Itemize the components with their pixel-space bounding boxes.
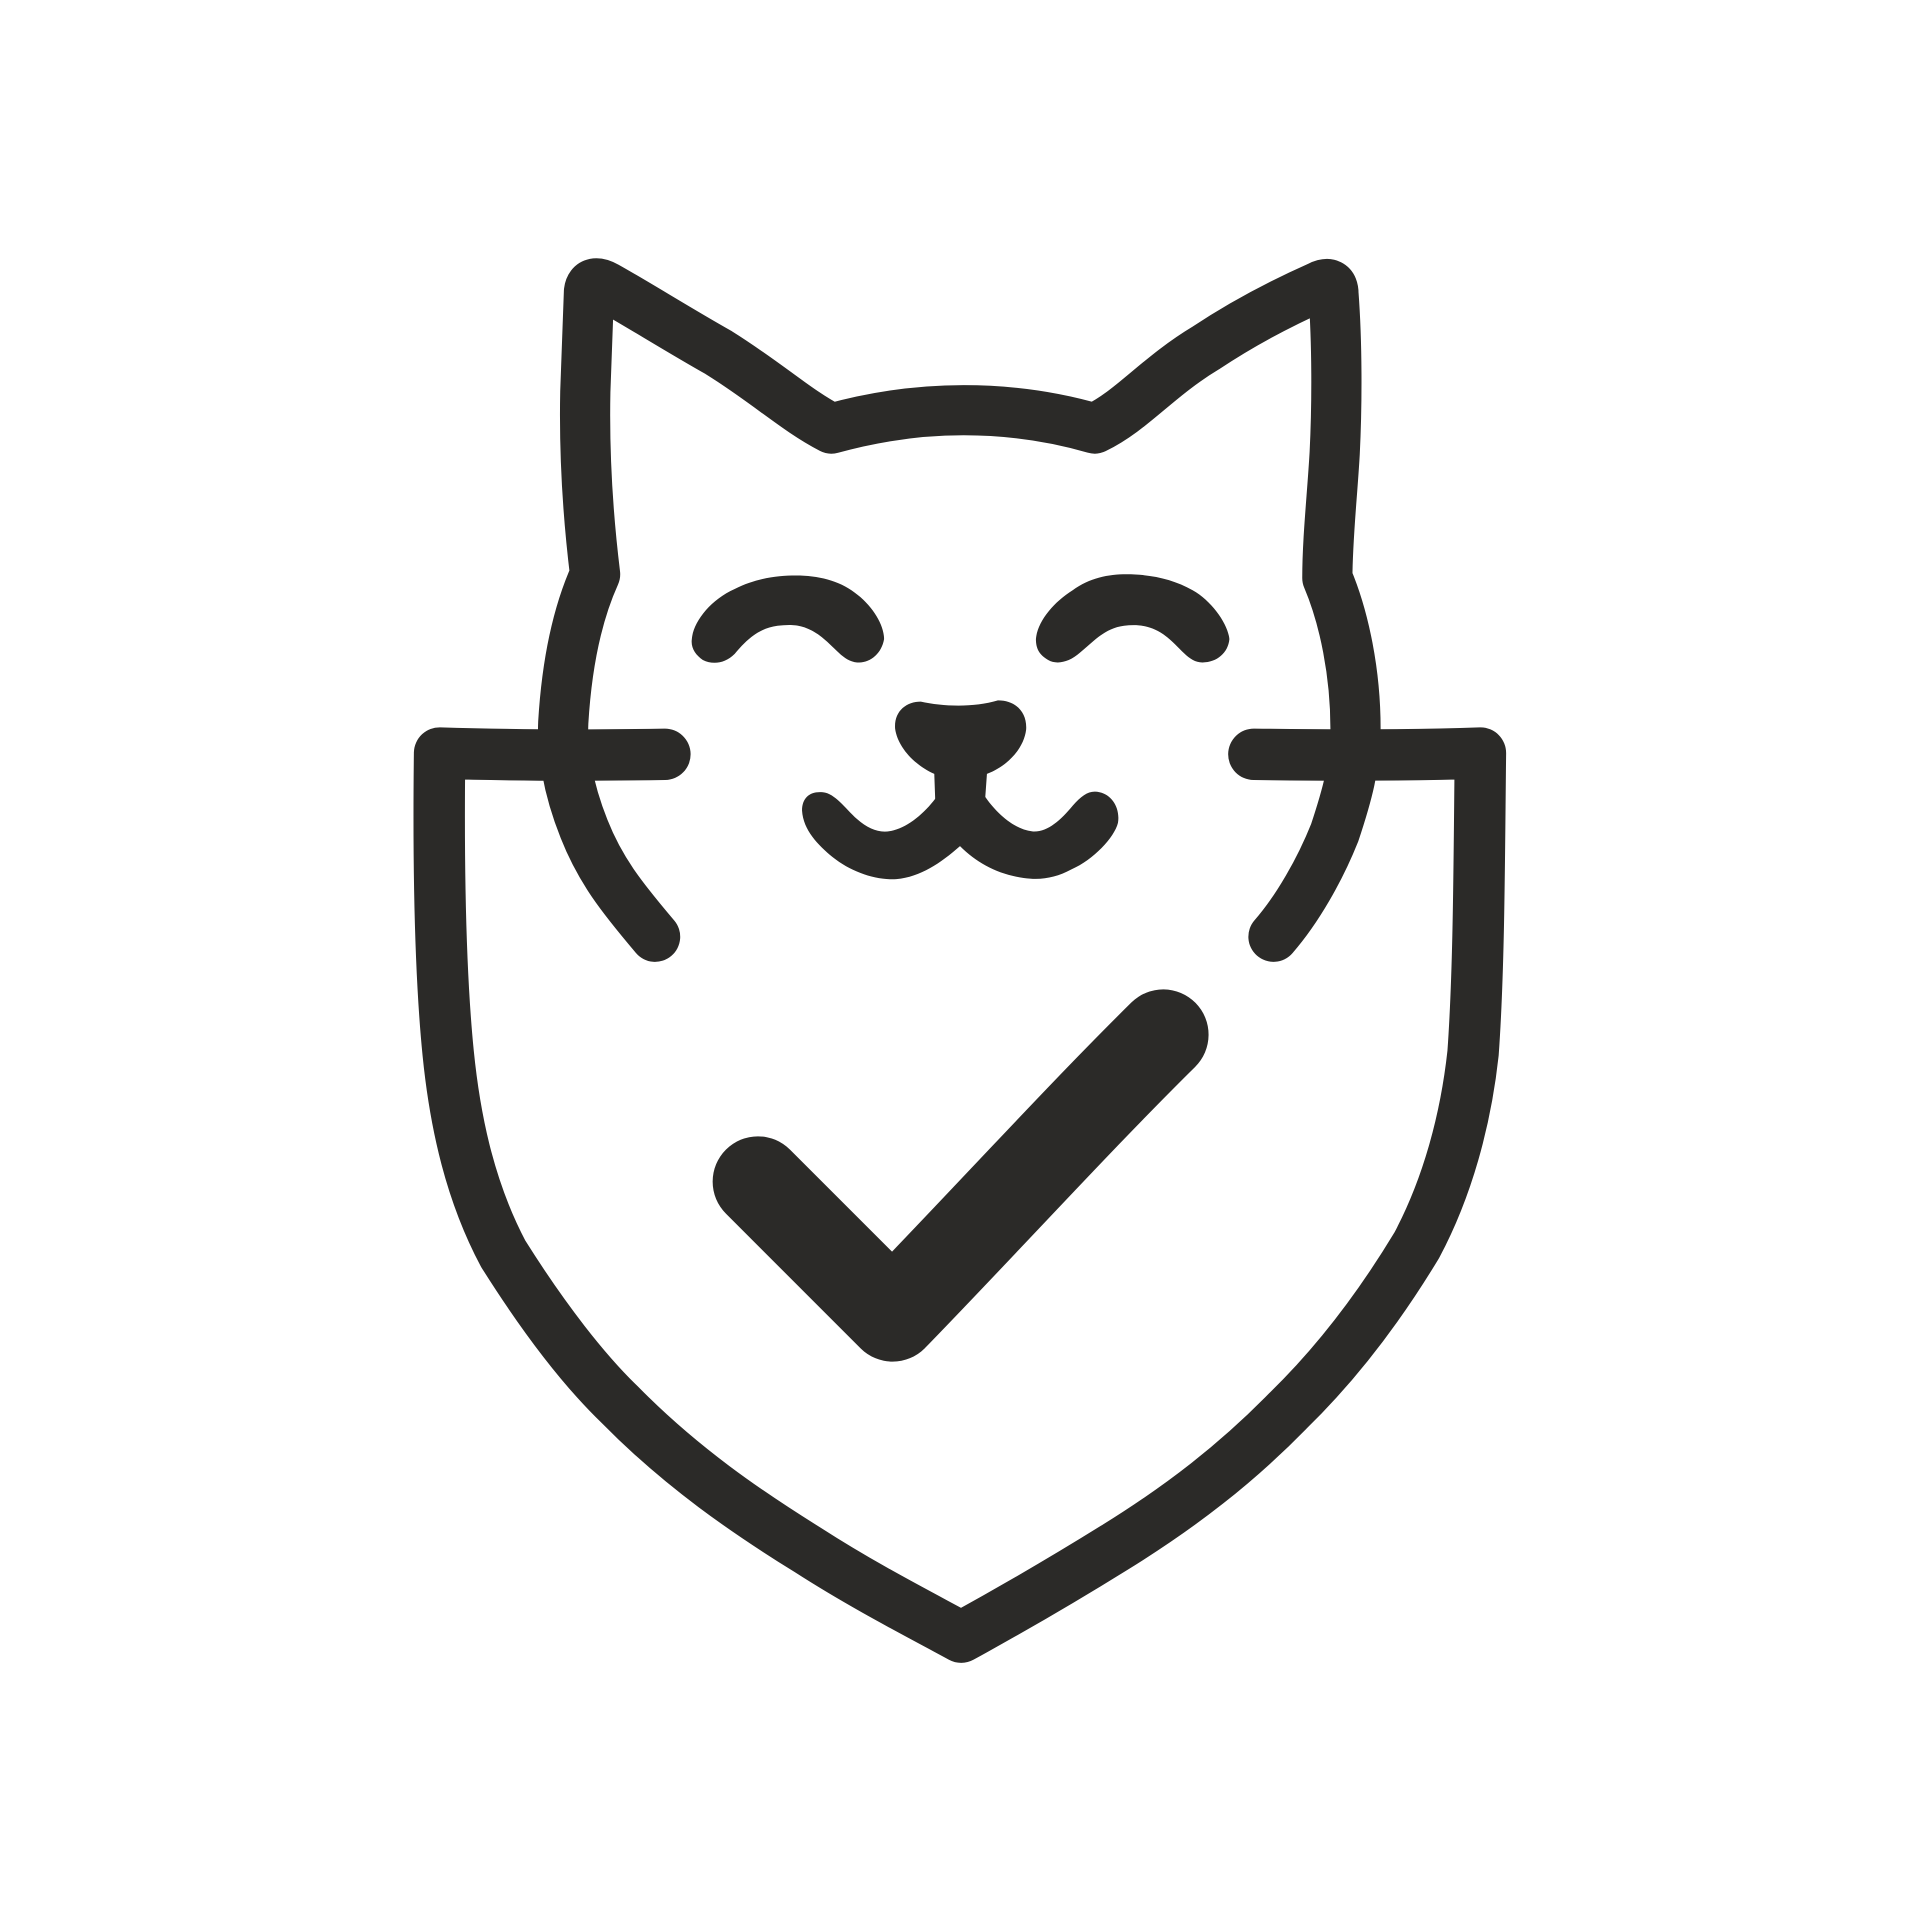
nose and philtrum: [895, 700, 1026, 808]
left eye: [692, 576, 884, 663]
right eye: [1036, 574, 1229, 662]
check mark: [758, 1035, 1163, 1316]
mouth: [802, 792, 1118, 879]
cat head outline: [563, 283, 1356, 937]
pocket shield outline: [439, 753, 1480, 1637]
